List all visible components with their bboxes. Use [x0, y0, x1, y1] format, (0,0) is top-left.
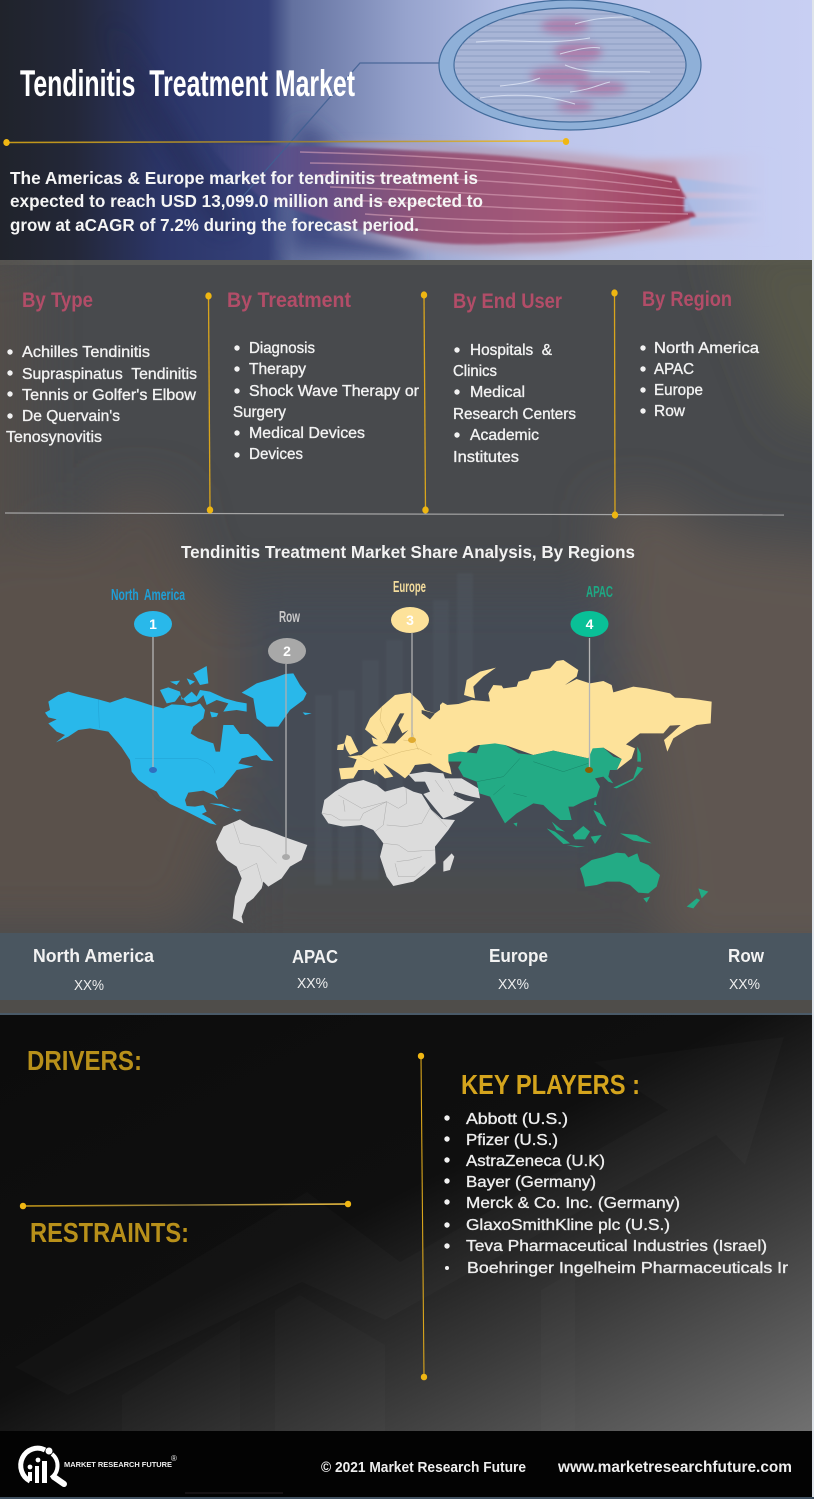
regional share table: XX%: [74, 977, 104, 994]
map pin: apac: [570, 584, 613, 773]
segment: by treatment: Medical Devices: [249, 425, 365, 442]
segment: by type: Tenosynovitis: [6, 429, 102, 446]
key players list: Merck & Co. Inc. (Germany): [466, 1195, 680, 1212]
map: russia and europe: [337, 660, 712, 779]
map pin: row: 2: [283, 643, 291, 659]
segment: by region: North America: [654, 340, 759, 357]
segment: by end user: Institutes: [453, 449, 519, 466]
illustration: arm and muscle: [154, 107, 740, 260]
panel: segments and map background: [0, 240, 814, 1013]
segment: by treatment: [227, 289, 420, 463]
segment: by type: By Type: [22, 289, 93, 312]
panel: drivers, restraints and key players: [0, 1015, 812, 1431]
map pin: north america: 1: [149, 616, 157, 632]
segment: by end user: Clinics: [453, 363, 497, 380]
map pin: apac: APAC: [586, 584, 613, 601]
copyright: © 2021 Market Research Future: [321, 1459, 526, 1476]
regional share table: North America: [33, 946, 155, 966]
divider with dots: [20, 1201, 351, 1209]
regional share table: XX%: [498, 976, 529, 993]
key players list: Abbott (U.S.): [466, 1111, 568, 1128]
segment: by treatment: Surgery: [233, 404, 286, 421]
map pin: row: [268, 609, 306, 860]
segment: by end user: Research Centers: [453, 406, 576, 423]
heading: key players: KEY PLAYERS :: [461, 1069, 640, 1100]
map heading: Tendinitis Treatment Market Share Analysis, By Regions: [181, 542, 635, 562]
logo icon: [21, 1448, 64, 1484]
regional share table: Row: [728, 946, 765, 966]
regional share table: [0, 933, 812, 1000]
segment: by end user: By End User: [453, 290, 562, 313]
key players list: Teva Pharmaceutical Industries (Israel): [466, 1238, 767, 1255]
map: africa and middle east: [322, 772, 480, 886]
segment: by end user: [453, 290, 576, 466]
segment: by treatment: By Treatment: [227, 289, 351, 312]
segment: by type: Tennis or Golfer's Elbow: [22, 387, 196, 404]
segment: by treatment: Diagnosis: [249, 340, 315, 357]
segment: by end user: Hospitals &: [470, 342, 552, 359]
segment: by region: Row: [654, 403, 685, 420]
hero summary text: expected to reach USD 13,099.0 million and is expected to: [10, 191, 483, 211]
regional share table: APAC: [292, 947, 338, 967]
map pin: row: Row: [279, 609, 300, 626]
logo wordmark: ®: [171, 1454, 177, 1463]
segment: by region: Europe: [654, 382, 703, 399]
footer bar: [0, 1431, 814, 1499]
map pin: europe: [391, 579, 429, 743]
map: latin america: [216, 819, 307, 923]
map pin: europe: 3: [406, 612, 414, 628]
key players list: AstraZeneca (U.K): [466, 1153, 605, 1170]
segment: by end user: Academic: [470, 427, 539, 444]
map pin: europe: Europe: [393, 579, 426, 596]
panel: hero banner: [0, 0, 812, 260]
hero summary text: The Americas & Europe market for tendinitis treatment is: [10, 168, 478, 188]
illustration: callout connector: [238, 63, 440, 202]
vertical divider: [418, 1053, 427, 1380]
segment: by treatment: Shock Wave Therapy or: [249, 383, 420, 400]
logo wordmark: MARKET RESEARCH FUTURE: [64, 1460, 172, 1469]
segment: by type: [6, 289, 197, 446]
key players list: GlaxoSmithKline plc (U.S.): [466, 1217, 670, 1234]
map pin: north america: North America: [111, 587, 185, 604]
key players list: Pfizer (U.S.): [466, 1132, 558, 1149]
regional share table: Europe: [489, 946, 548, 966]
map: asia pacific: [448, 743, 708, 908]
hero summary text: grow at aCAGR of 7.2% during the forecast period.: [10, 215, 419, 235]
segment: by type: De Quervain's: [22, 408, 120, 425]
map pin: north america: [111, 587, 185, 773]
segment: by treatment: Devices: [249, 446, 303, 463]
heading: restraints: RESTRAINTS:: [30, 1217, 189, 1248]
regional share table: XX%: [729, 976, 760, 993]
divider with dots: [3, 138, 569, 146]
map: north america: [45, 666, 312, 825]
website: www.marketresearchfuture.com: [557, 1459, 792, 1476]
segment: by type: Supraspinatus Tendinitis: [22, 366, 197, 383]
regional share table: XX%: [297, 975, 328, 992]
segment: by treatment: Therapy: [249, 361, 306, 378]
logo wordmark: [64, 1454, 177, 1469]
key players list: Bayer (Germany): [466, 1174, 596, 1191]
segment: by region: APAC: [654, 361, 694, 378]
key players list: [444, 1111, 789, 1277]
map pin: apac: 4: [586, 616, 594, 632]
segment: by region: [640, 288, 759, 420]
title: Tendinitis Treatment Market: [20, 63, 355, 104]
segment: by type: Achilles Tendinitis: [22, 344, 150, 361]
segment: by end user: Medical: [470, 384, 525, 401]
key players list: Boehringer Ingelheim Pharmaceuticals Ir: [467, 1260, 789, 1277]
heading: drivers: DRIVERS:: [27, 1045, 142, 1076]
world map: [45, 660, 712, 923]
segment: by region: By Region: [642, 288, 732, 311]
hero summary text: [10, 168, 483, 235]
illustration: magnified tendon lens: [439, 0, 701, 130]
